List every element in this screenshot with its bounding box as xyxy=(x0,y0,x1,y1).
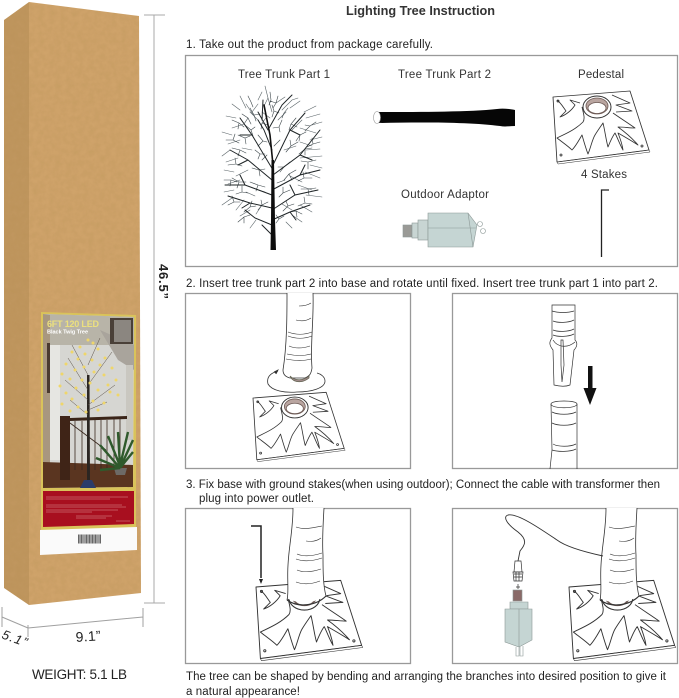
height dimension xyxy=(144,15,171,603)
closing note xyxy=(186,671,667,698)
cable xyxy=(506,515,603,561)
upper trunk section xyxy=(550,305,577,386)
tree illustration xyxy=(222,86,322,235)
closing note: The tree can be shaped by bending and arranging the branches into desired position to give it xyxy=(186,671,667,683)
width value: 9.1” xyxy=(75,627,101,645)
plug connector xyxy=(513,561,523,589)
closing note: a natural appearance! xyxy=(186,686,300,698)
trunk illustration xyxy=(286,508,327,605)
step 3 text: 3. Fix base with ground stakes(when using outdoor); Connect the cable with transformer then xyxy=(186,479,660,491)
part label: pedestal: Pedestal xyxy=(578,69,624,81)
product box xyxy=(4,2,141,605)
trunk illustration xyxy=(283,293,313,382)
label red panel xyxy=(43,491,134,527)
lower trunk section xyxy=(550,401,577,469)
part label: tree trunk part 2: Tree Trunk Part 2 xyxy=(398,69,491,81)
part label: tree trunk part 1: Tree Trunk Part 1 xyxy=(238,69,330,81)
rotation arrow xyxy=(268,370,325,392)
label heading: 6FT 120 LED xyxy=(47,319,100,329)
part label: outdoor adaptor: Outdoor Adaptor xyxy=(401,189,489,201)
step 3 text xyxy=(186,479,660,505)
step 3 text: plug into power outlet. xyxy=(199,493,314,505)
label barcode xyxy=(40,527,137,555)
tree trunk xyxy=(270,160,276,250)
box left face xyxy=(4,2,29,605)
box front face xyxy=(29,2,141,605)
trunk part 2 illustration xyxy=(374,109,515,126)
down arrow xyxy=(584,366,596,405)
panel: step 2 join trunk parts xyxy=(452,294,678,469)
width and depth dimensions xyxy=(0,607,143,650)
height value: 46.5” xyxy=(156,264,171,299)
transformer xyxy=(505,590,532,656)
label subheading: Black Twig Tree xyxy=(47,330,88,336)
potted plant xyxy=(96,432,133,475)
weight: WEIGHT: 5.1 LB xyxy=(32,667,127,682)
panel: step 3 connect cable xyxy=(452,508,678,664)
title: Lighting Tree Instruction xyxy=(346,3,495,18)
panel: step 2 rotate trunk into base xyxy=(186,293,410,468)
step 2 text: 2. Insert tree trunk part 2 into base and rotate until fixed. Insert tree trunk part 1 into part 2. xyxy=(186,278,658,290)
stake with arrow xyxy=(251,526,263,584)
part label: 4 stakes: 4 Stakes xyxy=(581,169,627,181)
stake illustration xyxy=(602,190,609,257)
box label xyxy=(40,312,137,555)
label photo xyxy=(43,314,134,488)
pedestal illustration xyxy=(553,91,650,164)
panel: step 3 stake the base xyxy=(186,508,410,664)
base illustration xyxy=(256,580,363,661)
outdoor adaptor illustration xyxy=(403,213,486,247)
panel: step 1 parts xyxy=(186,56,678,266)
depth value: 5.1” xyxy=(0,627,30,650)
base illustration xyxy=(569,580,676,661)
base illustration xyxy=(253,392,345,462)
trunk illustration xyxy=(599,508,640,605)
step 1 text: 1. Take out the product from package carefully. xyxy=(186,39,433,51)
